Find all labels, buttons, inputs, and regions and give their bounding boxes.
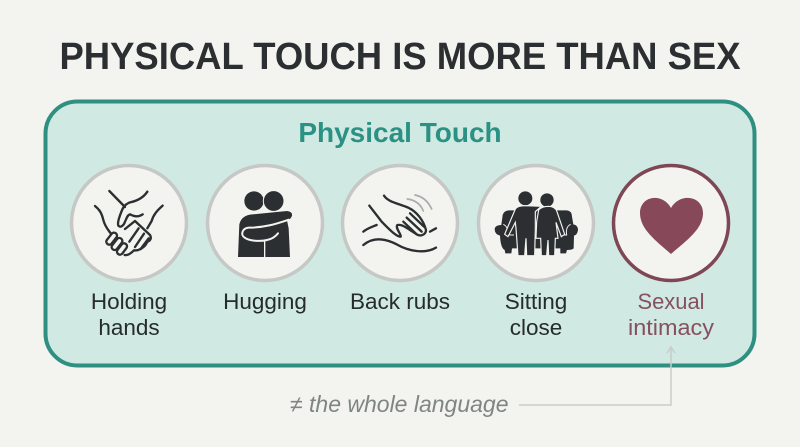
arrow: [519, 347, 675, 405]
label: Sexual: [638, 289, 704, 314]
icon: back rub hand: [363, 195, 436, 251]
icon: holding hands: [95, 191, 163, 255]
item: holding hands: [72, 166, 186, 340]
item: sexual intimacy: [614, 166, 728, 340]
item: holding hands: hands: [98, 315, 160, 340]
item: sitting close: [478, 166, 594, 340]
label: Back rubs: [350, 289, 450, 314]
item: hugging: [208, 166, 322, 314]
icon: heart: [640, 198, 703, 254]
title: PHYSICAL TOUCH IS MORE THAN SEX: [60, 36, 741, 78]
icon: hugging: [238, 191, 292, 258]
panel: physical touch: [46, 102, 754, 366]
item: sexual intimacy: intimacy: [628, 315, 715, 340]
label: Holding: [91, 289, 167, 314]
item: sitting close: close: [510, 315, 562, 340]
icon: couple on couch: [495, 191, 578, 256]
label: Hugging: [223, 289, 307, 314]
item: back rubs: [342, 166, 458, 314]
panel heading: Physical Touch: [298, 117, 502, 148]
annotation: ≠ the whole language: [290, 391, 509, 417]
label: Sitting: [505, 289, 567, 314]
